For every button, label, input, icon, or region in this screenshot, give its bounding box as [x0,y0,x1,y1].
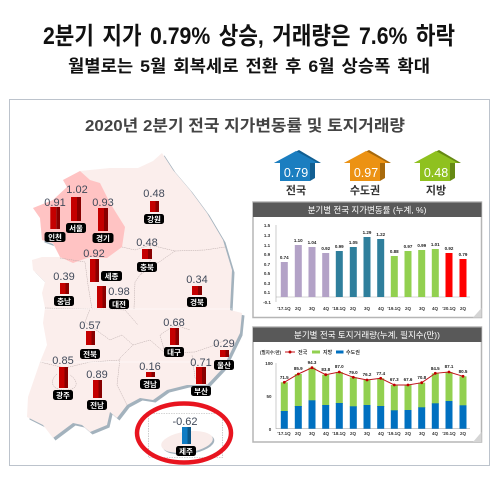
x axis labels: 4Q [378,431,384,436]
capital area bars [281,400,466,429]
x axis labels: '20.1Q [442,306,456,311]
region: Jeonnam [86,369,108,410]
y axis labels: 0.7 [264,262,271,267]
bar value labels: 0.97 [404,244,413,249]
bar value labels: 0.92 [321,246,331,251]
x axis labels: 3Q [419,306,425,311]
title: 2분기 지가 0.79% 상승, 거래량은 7.6% 하락 [43,23,455,50]
icon: house capital area [344,150,391,197]
region: Gyeongbuk: 경북 [190,297,204,307]
line value labels: 77.4 [376,371,386,376]
bar value labels: 0.74 [280,255,289,260]
Jeju island [160,428,216,458]
bar value labels: 0.99 [417,243,427,248]
callout: Jeju red circle [137,404,231,462]
region: Gwangju [52,355,74,400]
region: Gyeonggi: 0.93 [92,197,114,209]
x axis labels: 2Q [350,431,356,436]
region: Jeonnam: 0.89 [86,369,108,381]
region: Busan: 부산 [194,386,208,396]
legend: (필지수:만) [260,349,282,356]
y axis labels: 1.5 [264,223,271,228]
line value labels: 80.5 [459,369,468,374]
legend: 지방 [323,349,333,356]
x axis labels: 3Q [364,306,370,311]
region: Incheon: 인천 [48,232,62,242]
bar value labels [280,230,468,260]
region: Ulsan: 0.29 [213,338,235,350]
y axis labels: -0.1 [263,300,271,305]
region: Daegu: 대구 [167,347,181,357]
line value labels: 85.9 [294,366,303,371]
panel heading: 2020년 2분기 전국 지가변동률 및 토지거래량 [85,117,405,135]
region: Daejeon: 대전 [112,299,126,309]
icon: house capital area: 수도권 [350,184,380,197]
region: Gangwon: 0.48 [143,188,165,200]
x axis labels: 3Q [309,306,315,311]
region: Ulsan: 울산 [217,360,231,370]
y axis labels [265,361,273,432]
y axis labels: 0.3 [264,281,271,286]
x axis labels: 2Q [295,431,301,436]
region: Jeonbuk [79,320,101,359]
x axis labels: 4Q [432,431,438,436]
line value labels [280,360,468,382]
region: Sejong: 0.92 [83,248,105,260]
bar value labels: 1.01 [431,242,440,247]
icon: house provinces [414,150,461,197]
bar value labels: 0.79 [459,252,468,257]
line value labels: 83.8 [321,367,331,372]
bar value labels: 1.05 [349,240,358,245]
region: Gangwon [143,188,165,224]
region: Chungnam [53,271,75,306]
line value labels: 67.6 [404,377,413,382]
x axis labels: 2Q [460,431,466,436]
chart header: 분기별 전국 지가변동률 (누계, %) [308,205,427,215]
line value labels: 87.1 [445,364,454,369]
region: Gyeongbuk: 0.34 [186,274,208,286]
line value labels: 71.5 [280,375,289,380]
region: Busan [190,357,212,396]
region: Jeonbuk: 0.57 [79,320,101,332]
region: Gwangju: 광주 [56,390,70,400]
region: Chungnam: 충남 [57,296,71,306]
region: Gyeongbuk [186,274,208,307]
x axis labels: 2Q [295,306,301,311]
chart header [253,328,482,342]
line value labels: 87.0 [335,364,344,369]
region: Chungnam: 0.39 [53,271,75,283]
x axis labels: '19.1Q [387,431,401,436]
legend [260,349,360,356]
line value labels: 70.8 [417,375,427,380]
icon: house nationwide: 전국 [286,184,306,197]
legend: 수도권 [346,349,360,356]
x axis labels: 4Q [323,306,329,311]
x axis labels: 3Q [309,431,315,436]
region: Sejong: 세종 [105,271,118,281]
bar value labels: 0.92 [445,246,454,251]
region: Jeju: 제주 [179,446,193,456]
line value labels: 84.5 [431,366,440,371]
region: Chungbuk [136,237,158,272]
y axis labels: 1.1 [264,243,271,248]
icon: house provinces: 지방 [426,184,446,197]
bars [281,237,466,297]
y axis labels: 0 [269,427,272,432]
y axis labels: 0.5 [264,271,271,276]
x axis labels: 4Q [432,306,438,311]
line value labels: 94.3 [308,360,317,365]
x axis labels: '18.1Q [332,431,346,436]
x axis labels: 2Q [350,306,356,311]
x axis labels: 2Q [405,306,411,311]
bar value labels: 1.22 [376,232,386,237]
y axis labels: 50 [266,394,272,399]
panel: infographic frame [10,100,490,466]
y axis labels [263,223,271,305]
x axis labels: '20.1Q [442,431,456,436]
chart header [253,202,482,217]
legend: 전국 [298,349,308,356]
line value labels: 76.2 [363,372,372,377]
x axis labels: 2Q [460,306,466,311]
x axis labels: 3Q [419,431,425,436]
region: Gyeongnam: 경남 [143,379,157,389]
icon: house nationwide: 0.79 [284,166,308,180]
region: Daejeon: 0.98 [108,286,130,298]
region: Chungbuk: 0.48 [136,237,158,249]
region: Incheon: 0.91 [44,197,66,209]
x axis labels: '17.1Q [277,306,291,311]
region: Sejong [83,248,122,282]
bar value labels: 1.10 [294,238,303,243]
region: Jeonbuk: 전북 [83,349,97,359]
icon: house provinces: 0.48 [424,166,448,180]
region: Gyeonggi [92,197,114,243]
region: Jeju [172,416,198,456]
x axis labels: 3Q [364,431,370,436]
x axis labels: '19.1Q [387,306,401,311]
provincial bars [281,368,466,412]
region: Gangwon: 강원 [147,214,161,224]
bar value labels: 1.04 [308,240,317,245]
x axis labels: 4Q [378,306,384,311]
x axis labels: 4Q [323,431,329,436]
icon: house capital area: 0.97 [354,166,378,180]
region: Gyeonggi: 경기 [96,233,110,243]
region: Chungbuk: 충북 [140,262,154,272]
region: Seoul [66,184,88,233]
region: Gyeongnam: 0.16 [139,361,161,373]
region: Daegu [163,317,185,357]
region: Daejeon [97,286,130,309]
y axis labels: 100 [265,361,273,366]
bar value labels: 0.99 [335,244,344,249]
region: Seoul: 서울 [69,223,83,233]
region: Gyeongnam [139,361,161,389]
region: Jeju: -0.62 [172,416,198,428]
panel: land transaction chart [253,327,482,442]
region: Busan: 0.71 [190,357,212,369]
x axis labels [277,431,466,436]
line value labels: 79.0 [349,370,358,375]
x axis labels: 2Q [405,431,411,436]
total line [283,366,464,386]
region: Ulsan [213,338,235,370]
Jeju dotted box [148,414,222,458]
x axis labels [277,306,466,311]
region: Incheon [44,197,66,242]
region: Daegu: 0.68 [163,317,185,329]
region: Seoul metropolitan area [33,171,125,263]
chart header: 분기별 전국 토지거래량(누계, 필지수(만)) [294,330,440,340]
icon: house nationwide [274,150,321,197]
y axis labels: 1.3 [264,233,271,238]
line value labels: 67.3 [390,377,399,382]
region: Jeonnam: 전남 [90,400,104,410]
panel: land price bar chart [253,202,482,318]
bar value labels: 0.88 [390,249,399,254]
map of Korea [27,153,244,440]
y axis labels: 0.9 [264,252,271,257]
region: Gwangju: 0.85 [52,355,74,367]
subtitle: 월별로는 5월 회복세로 전환 후 6월 상승폭 확대 [68,57,430,76]
x axis labels: '17.1Q [277,431,291,436]
y axis labels: 0.1 [264,290,271,295]
region: Seoul: 1.02 [66,184,88,196]
x axis labels: '18.1Q [332,306,346,311]
bar value labels: 1.29 [363,230,372,235]
